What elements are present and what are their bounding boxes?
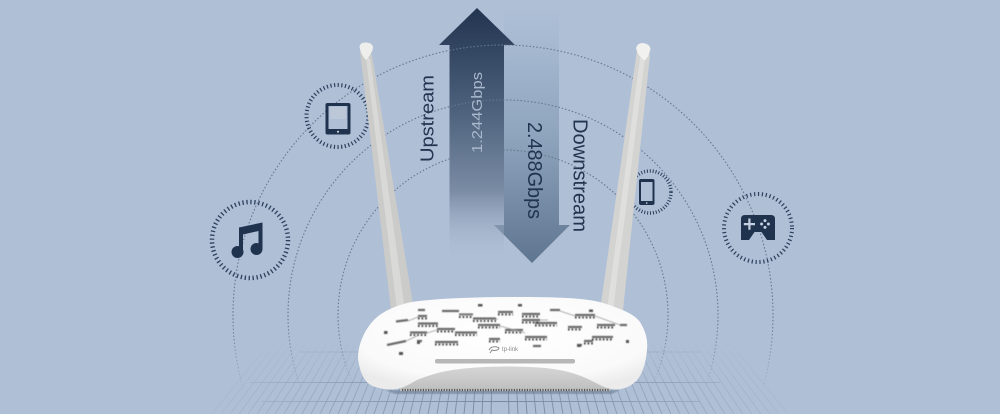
router [358,297,647,394]
arrow: downstream [494,8,570,263]
arrow: upstream [439,8,515,262]
icon: game controller [724,194,792,262]
dotted signal arcs [233,45,773,392]
router LED strip [435,359,575,364]
infographic canvas [210,8,794,414]
router vents [384,304,629,355]
left antenna [360,42,414,310]
router body [358,297,647,390]
right antenna [600,43,650,310]
label: 1.244Gbps: 1.244Gbps [469,72,486,153]
icon: music note [212,202,288,278]
label: 2.488Gbps: 2.488Gbps [523,122,545,219]
label: Upstream: Upstream [416,75,438,162]
router logo: tp-link [502,347,519,353]
router shadow [385,390,620,394]
router underside [400,362,610,391]
floor grid [230,352,770,414]
label: Downstream: Downstream [568,119,590,232]
icon: tablet [306,85,368,147]
icon: phone [629,171,671,213]
